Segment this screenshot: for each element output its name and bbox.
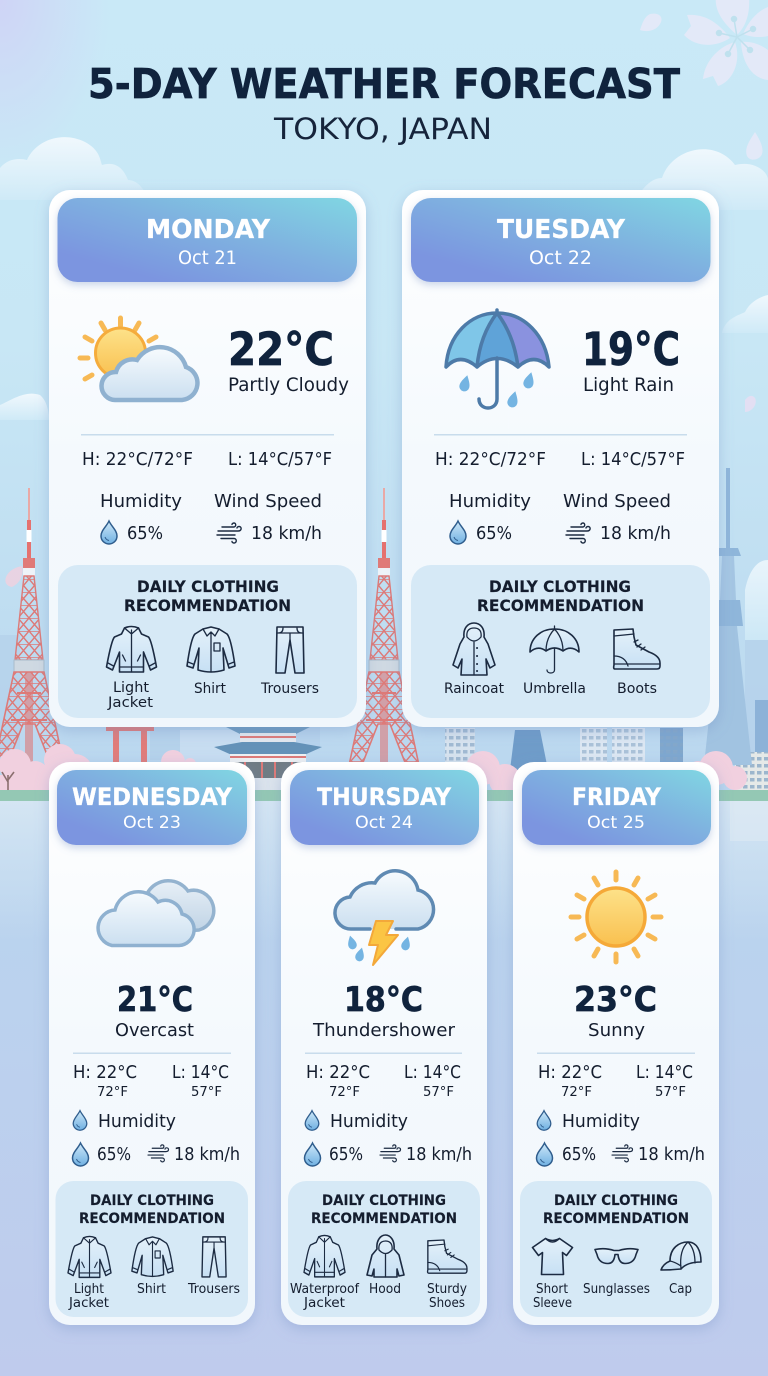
Wednesday humidity	[72, 1111, 176, 1166]
Wednesday high	[73, 1062, 137, 1100]
Wednesday condition: Overcast	[115, 1020, 194, 1041]
Wednesday wind speed: 18 km/h	[174, 1144, 240, 1165]
subtitle: TOKYO, JAPAN	[273, 112, 492, 146]
panel: Wednesday	[49, 762, 255, 1325]
Wednesday clothing recommendation	[56, 1181, 248, 1317]
Tuesday header: Oct 22	[529, 247, 592, 269]
label: light jacket	[68, 1282, 109, 1311]
label: short sleeve: Short	[536, 1282, 568, 1297]
Thursday clothing recommendation	[288, 1181, 480, 1317]
Thursday humidity: Humidity	[330, 1111, 408, 1132]
label: sturdy shoes: Shoes	[429, 1296, 465, 1311]
Friday temperature: 23°C	[574, 980, 657, 1020]
Thursday header: Oct 24	[355, 813, 413, 833]
Wednesday humidity: 65%	[97, 1144, 131, 1165]
Friday condition: Sunny	[588, 1020, 645, 1041]
Thursday humidity: 65%	[329, 1144, 363, 1165]
panel: Monday	[49, 190, 366, 727]
Thursday low	[404, 1062, 461, 1100]
label: cap: Cap	[669, 1282, 692, 1297]
Tuesday low: L: 14°C/57°F	[581, 449, 685, 470]
background: pagoda	[214, 727, 322, 802]
Tuesday temperature: 19°C	[582, 323, 680, 376]
Thursday wind speed: 18 km/h	[406, 1144, 472, 1165]
Monday clothing recommendation: RECOMMENDATION	[124, 596, 291, 615]
Tuesday wind speed: 18 km/h	[600, 523, 671, 544]
Tuesday humidity	[449, 491, 531, 544]
panel: Tuesday	[402, 190, 719, 727]
label: waterproof jacket: Jacket	[303, 1296, 345, 1311]
Monday clothing recommendation	[58, 565, 357, 718]
Wednesday header	[57, 770, 247, 845]
Thursday humidity	[304, 1111, 408, 1166]
icon: sun	[571, 872, 661, 962]
Thursday wind speed	[380, 1144, 472, 1165]
Thursday header	[290, 770, 479, 845]
background: cherry blossom flower	[640, 0, 768, 160]
Tuesday wind speed: Wind Speed	[563, 491, 671, 512]
Friday wind speed	[612, 1144, 705, 1165]
Tuesday clothing recommendation: RECOMMENDATION	[477, 596, 644, 615]
icon: light jacket	[68, 1236, 111, 1277]
Friday low	[636, 1062, 693, 1100]
label: trousers: Trousers	[260, 681, 319, 697]
Friday low: 57°F	[655, 1084, 686, 1100]
icon: partly cloudy	[80, 318, 197, 400]
Friday high: H: 22°C	[538, 1062, 602, 1083]
icon: boots	[614, 629, 660, 669]
icon: raincoat	[453, 623, 495, 675]
Monday wind speed	[214, 491, 322, 544]
label: light jacket: Jacket	[107, 695, 154, 711]
Tuesday wind speed	[563, 491, 671, 544]
label: light jacket: Light	[113, 680, 150, 696]
Friday header: Oct 25	[587, 813, 645, 833]
Thursday high: H: 22°C	[306, 1062, 370, 1083]
label: waterproof jacket: Waterproof	[290, 1282, 359, 1297]
label: hood: Hood	[369, 1282, 401, 1297]
title: 5-DAY WEATHER FORECAST	[88, 60, 680, 108]
Friday humidity	[536, 1111, 640, 1166]
Friday humidity: 65%	[562, 1144, 596, 1165]
label: light jacket: Light	[74, 1282, 104, 1297]
Monday low: L: 14°C/57°F	[228, 449, 332, 470]
Monday high: H: 22°C/72°F	[82, 449, 193, 470]
Thursday low: 57°F	[423, 1084, 454, 1100]
label: umbrella: Umbrella	[523, 681, 586, 697]
Wednesday header: WEDNESDAY	[72, 783, 233, 811]
icon: overcast clouds	[98, 881, 214, 946]
background: Tokyo Tower left	[0, 488, 65, 770]
Wednesday high: H: 22°C	[73, 1062, 137, 1083]
Monday header: Oct 21	[178, 247, 237, 269]
Tuesday header: TUESDAY	[497, 215, 626, 245]
background: green riverbank	[0, 790, 768, 801]
label: shirt: Shirt	[137, 1282, 166, 1297]
Wednesday humidity: Humidity	[98, 1111, 176, 1132]
label: sunglasses: Sunglasses	[583, 1282, 650, 1297]
icon: shirt	[132, 1237, 173, 1276]
icon: sunglasses	[595, 1249, 638, 1264]
Thursday temperature: 18°C	[344, 980, 423, 1020]
Monday wind speed: 18 km/h	[251, 523, 322, 544]
Friday clothing recommendation: RECOMMENDATION	[543, 1211, 689, 1227]
Thursday clothing recommendation: RECOMMENDATION	[311, 1211, 457, 1227]
label: light jacket	[107, 680, 154, 711]
Friday high	[538, 1062, 602, 1100]
Thursday high	[306, 1062, 370, 1100]
Friday low: L: 14°C	[636, 1062, 693, 1083]
background: clouds	[0, 137, 768, 640]
Monday condition: Partly Cloudy	[228, 374, 349, 396]
label: light jacket: Jacket	[68, 1296, 109, 1311]
Monday wind speed: Wind Speed	[214, 491, 322, 512]
panel: Friday	[513, 762, 719, 1325]
label: sturdy shoes: Sturdy	[427, 1282, 467, 1297]
Wednesday low: 57°F	[191, 1084, 222, 1100]
Friday clothing recommendation: DAILY CLOTHING	[554, 1193, 678, 1209]
Friday high: 72°F	[561, 1084, 592, 1100]
Monday temperature: 22°C	[228, 323, 334, 376]
Friday header: FRIDAY	[572, 783, 662, 811]
label: short sleeve: Sleeve	[533, 1296, 572, 1311]
Wednesday temperature: 21°C	[117, 980, 193, 1020]
Tuesday high: H: 22°C/72°F	[435, 449, 546, 470]
icon: sturdy shoes	[428, 1240, 467, 1273]
Thursday condition: Thundershower	[312, 1020, 456, 1041]
background: distant buildings	[0, 635, 768, 770]
Wednesday header: Oct 23	[123, 813, 181, 833]
Friday clothing recommendation	[520, 1181, 712, 1317]
background: torii gate	[106, 727, 154, 771]
Monday header: MONDAY	[146, 215, 271, 245]
Monday humidity	[100, 491, 182, 544]
label: sturdy shoes	[427, 1282, 467, 1311]
Wednesday low	[172, 1062, 229, 1100]
Thursday high: 72°F	[329, 1084, 360, 1100]
icon: trousers	[276, 627, 304, 673]
background: water	[0, 801, 768, 941]
label: boots: Boots	[617, 681, 657, 697]
Friday humidity: Humidity	[562, 1111, 640, 1132]
icon: waterproof jacket	[304, 1235, 345, 1277]
icon: umbrella	[530, 626, 579, 673]
Monday humidity: Humidity	[100, 491, 182, 512]
background: Tokyo Skytree	[704, 468, 752, 765]
Friday header	[522, 770, 711, 845]
background: Tokyo Tower centre	[348, 488, 420, 770]
label: raincoat: Raincoat	[444, 681, 505, 697]
Wednesday low: L: 14°C	[172, 1062, 229, 1083]
Monday clothing recommendation: DAILY CLOTHING	[137, 577, 279, 596]
Tuesday humidity: 65%	[476, 523, 512, 544]
icon: trousers	[202, 1237, 226, 1277]
icon: umbrella with rain	[446, 310, 549, 409]
Wednesday clothing recommendation: DAILY CLOTHING	[90, 1193, 214, 1209]
label: short sleeve	[533, 1282, 572, 1311]
background: cherry trees	[0, 566, 747, 800]
Wednesday clothing recommendation: RECOMMENDATION	[79, 1211, 225, 1227]
label: shirt: Shirt	[194, 681, 226, 697]
Tuesday humidity: Humidity	[449, 491, 531, 512]
icon: shirt	[187, 627, 235, 672]
icon: thunder cloud	[335, 871, 434, 965]
Thursday low: L: 14°C	[404, 1062, 461, 1083]
icon: hood	[367, 1235, 404, 1277]
label: trousers: Trousers	[187, 1282, 240, 1297]
panel: Thursday	[281, 762, 487, 1325]
icon: short sleeve shirt	[532, 1238, 572, 1274]
Monday humidity: 65%	[127, 523, 163, 544]
icon: light jacket	[106, 626, 156, 672]
icon: cap	[661, 1242, 701, 1270]
Monday header	[58, 198, 357, 282]
Wednesday wind speed	[148, 1144, 240, 1165]
Tuesday clothing recommendation	[411, 565, 710, 718]
Tuesday header	[411, 198, 710, 282]
label: waterproof jacket	[290, 1282, 359, 1311]
Thursday clothing recommendation: DAILY CLOTHING	[322, 1193, 446, 1209]
Thursday header: THURSDAY	[317, 783, 452, 811]
Wednesday high: 72°F	[97, 1084, 128, 1100]
Tuesday clothing recommendation: DAILY CLOTHING	[489, 577, 631, 596]
Friday wind speed: 18 km/h	[638, 1144, 705, 1165]
Tuesday condition: Light Rain	[583, 374, 674, 396]
